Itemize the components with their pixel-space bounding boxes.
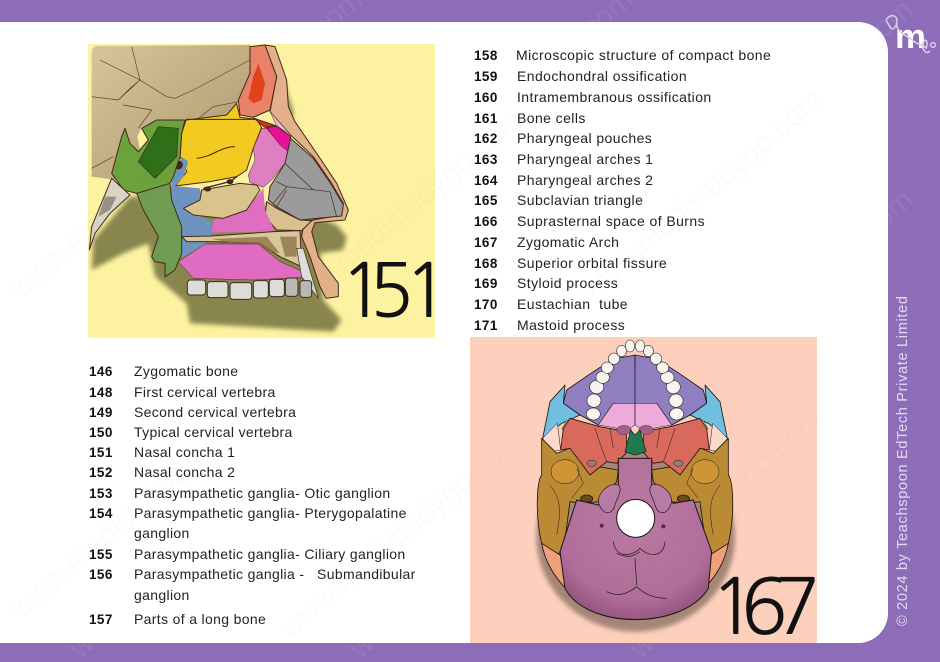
list: topics 158 to 171: 166 [474,214,498,229]
list: topics 158 to 171: 160 [474,90,498,105]
list: topics 146 to 157: Parasympathetic ganglia- Pterygopalatine [134,505,407,521]
occipital condyles [598,484,672,513]
logo: m with stethoscope: m [895,18,926,56]
list: topics 146 to 157: Nasal concha 2 [134,464,235,480]
list: topics 158 to 171: Bone cells [517,110,586,126]
text: www.medistudygo.com [623,443,880,662]
list: topics 146 to 157: Second cervical vertebra [134,404,296,420]
text: www.medistudygo.com [573,83,830,306]
list: topics 146 to 157: Parts of a long bone [134,611,266,627]
list: topics 158 to 171: 168 [474,256,498,271]
list: topics 146 to 157: 149 [89,405,113,420]
list: topics 158 to 171: 161 [474,111,498,126]
list: topics 158 to 171: 165 [474,193,498,208]
list: topics 146 to 157: 157 [89,612,113,627]
list: topics 158 to 171: 158 [474,48,498,63]
list: topics 158 to 171: Zygomatic Arch [517,234,619,250]
skin of nose [265,45,348,298]
vomer [625,430,646,455]
list: topics 146 to 157: 150 [89,425,113,440]
text: www.medistudygo.com [663,183,920,406]
list: topics 146 to 157: 148 [89,385,113,400]
list: topics 146 to 157: 146 [89,364,113,379]
list: topics 146 to 157: Zygomatic bone [134,363,238,379]
list: topics 158 to 171: Mastoid process [517,317,625,333]
list: topics 158 to 171: 162 [474,131,498,146]
list: topics 158 to 171: 169 [474,276,498,291]
red and magenta [254,118,277,127]
hard palate [182,231,302,267]
list: topics 146 to 157: 156 [89,567,113,582]
mastoid [89,178,130,250]
list: topics 158 to 171: 164 [474,173,498,188]
list: topics 158 to 171: 171 [474,318,498,333]
list: topics 158 to 171: Suprasternal space of Burns [517,213,705,229]
list: topics 158 to 171: Intramembranous ossification [517,89,712,105]
list: topics 146 to 157: ganglion [134,525,190,541]
list: topics 146 to 157: Typical cervical vertebra [134,424,293,440]
list: topics 146 to 157: Parasympathetic ganglia- Ciliary ganglion [134,546,406,562]
list: topics 158 to 171: 163 [474,152,498,167]
text: www.medistudygo.com [573,403,830,626]
list: topics 158 to 171: Pharyngeal arches 2 [517,172,653,188]
list: topics 158 to 171: Subclavian triangle [517,192,643,208]
text: www.medistudygo.com [273,423,530,646]
lower pink [212,188,275,233]
tan concha [183,183,260,218]
incisor wedge [297,248,318,298]
list: topics 146 to 157: Nasal concha 1 [134,444,235,460]
green sphenoid [112,120,185,193]
text: www.medistudygo.com [3,403,260,626]
text: www.medistudygo.com [3,83,260,306]
occipital bone [560,458,712,620]
copyright notice: © 2024 by Teachspoon EdTech Private Limited [895,296,911,626]
list: topics 146 to 157: 155 [89,547,113,562]
tan alar [265,202,312,231]
list: topics 146 to 157: Parasympathetic ganglia- Otic ganglion [134,485,390,501]
logo: m with stethoscope [885,14,936,56]
teeth [187,278,312,299]
cranium [92,45,252,180]
list: topics 158 to 171: Eustachian tube [517,296,628,312]
illustration: sagittal skull section, card 151 [88,44,435,338]
frontal sinus [238,45,277,117]
list: topics 158 to 171: 170 [474,297,498,312]
list: topics 158 to 171: Endochondral ossification [517,68,687,84]
pink [248,128,288,187]
gray cartilage [268,138,343,220]
list: topics 146 to 157: 152 [89,465,113,480]
skull shadow [536,442,735,632]
list: topics 158 to 171: 159 [474,69,498,84]
blue sphenoid [170,157,212,258]
text: www.medistudygo.com [63,443,320,662]
list: topics 146 to 157: Parasympathetic ganglia - Submandibular [134,566,416,582]
foramen magnum [617,499,655,537]
list: topics 158 to 171: 167 [474,235,498,250]
list: topics 158 to 171: Superior orbital fissure [517,255,667,271]
list: topics 146 to 157: ganglion [134,587,190,603]
list: topics 146 to 157: 153 [89,486,113,501]
drop shadow [92,80,347,332]
list: topics 146 to 157: 154 [89,506,113,521]
list: topics 158 to 171: Pharyngeal arches 1 [517,151,653,167]
illustration: inferior skull base, card 167 [470,337,817,643]
text: www.medistudygo.com [343,443,600,662]
list: topics 146 to 157: 151 [89,445,113,460]
list: topics 158 to 171: Microscopic structure of compact bone [516,47,771,63]
list: topics 146 to 157: First cervical vertebra [134,384,276,400]
list: topics 158 to 171: Styloid process [517,275,618,291]
text: www.medistudygo.com [273,103,530,326]
list: topics 158 to 171: Pharyngeal pouches [517,130,652,146]
lower green pterygoid [137,183,182,277]
yellow ethmoid [175,103,262,186]
